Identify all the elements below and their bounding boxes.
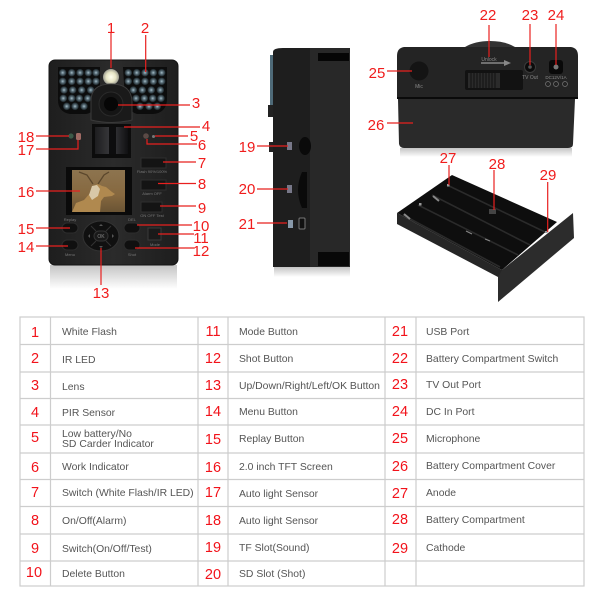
- callout numbers: 14: [18, 239, 34, 256]
- callout numbers: 12: [193, 243, 209, 260]
- icon: left buttons: Menu: [65, 252, 75, 257]
- callout numbers: 26: [368, 117, 384, 134]
- callout numbers: 20: [239, 181, 255, 198]
- icon: PIR sensor: [92, 124, 131, 158]
- panel: back view of camera: [397, 41, 578, 157]
- column 2 descriptions: [239, 327, 380, 580]
- column 3 descriptions: Microphone: [426, 434, 481, 445]
- column 3 descriptions: [426, 327, 558, 554]
- icon: IR LED array right: [123, 67, 167, 114]
- icon: direction pad: OK: [97, 234, 105, 240]
- icon: TV out port: [522, 62, 539, 81]
- 2.0 inch TFT screen: [66, 167, 132, 215]
- column 2 descriptions: 2.0 inch TFT Screen: [239, 462, 333, 473]
- callout numbers: 6: [198, 137, 206, 154]
- callout numbers: 11: [193, 230, 209, 247]
- column 1 descriptions: SD Carder Indicator: [62, 439, 154, 450]
- callout numbers: [18, 7, 564, 302]
- column 1 descriptions: [62, 327, 194, 580]
- callout numbers: 21: [239, 216, 255, 233]
- icon: switches: [137, 158, 168, 218]
- column 1 descriptions: On/Off(Alarm): [62, 516, 126, 527]
- column 2 descriptions: Auto light Sensor: [239, 516, 319, 527]
- callout numbers: 7: [198, 155, 206, 172]
- column 2 numbers: 17: [205, 485, 221, 501]
- front reflection: [50, 265, 177, 289]
- callout numbers: 15: [18, 221, 34, 238]
- callout numbers: 18: [18, 129, 34, 146]
- panel: front view of camera: [49, 60, 178, 289]
- column 3 numbers: [392, 324, 408, 557]
- tray outer wall: [397, 213, 502, 278]
- callout numbers: 17: [18, 142, 34, 159]
- column 2 numbers: 18: [205, 513, 221, 529]
- icon: indicators: [143, 133, 155, 139]
- column 1 numbers: 1: [31, 325, 39, 341]
- column 1 descriptions: Work Indicator: [62, 462, 129, 473]
- icon: right buttons: [124, 217, 161, 257]
- column 2 numbers: 13: [205, 378, 221, 394]
- column 1 descriptions: Switch (White Flash/IR LED): [62, 488, 194, 499]
- callout numbers: 8: [198, 176, 206, 193]
- column 2 descriptions: Menu Button: [239, 407, 298, 418]
- column 1 numbers: 2: [31, 351, 39, 367]
- callout numbers: 4: [202, 118, 210, 135]
- column 3 numbers: 22: [392, 351, 408, 367]
- callout numbers: 2: [141, 20, 149, 37]
- column 2 descriptions: TF Slot(Sound): [239, 543, 309, 554]
- column 3 numbers: 23: [392, 377, 408, 393]
- springs and contacts: [404, 184, 548, 241]
- column 1 numbers: [26, 325, 42, 581]
- column 3 numbers: 27: [392, 486, 408, 502]
- icon: SD slot: [287, 172, 307, 208]
- callout numbers: 24: [548, 7, 564, 24]
- column 2 descriptions: Mode Button: [239, 327, 298, 338]
- table: parts legend: [20, 317, 584, 586]
- icon: switches: Alarm OFF: [142, 191, 162, 196]
- column 3 numbers: 29: [392, 541, 408, 557]
- icon: microphone: Mic: [415, 84, 423, 90]
- icon: battery switch: [465, 57, 523, 90]
- icon: left buttons: Replay: [64, 217, 76, 222]
- column 1 numbers: 3: [31, 378, 39, 394]
- icon: right buttons: DEL: [128, 217, 137, 222]
- column 1 numbers: 5: [31, 430, 39, 446]
- callout numbers: 29: [540, 167, 556, 184]
- column 1 numbers: 6: [31, 460, 39, 476]
- battery channel ridges: [403, 185, 545, 267]
- callout numbers: 28: [489, 156, 505, 173]
- callout numbers: 23: [522, 7, 538, 24]
- camera front body: [49, 60, 178, 265]
- callout numbers: 10: [193, 218, 209, 235]
- column 2 numbers: 19: [205, 540, 221, 556]
- callout numbers: 3: [192, 95, 200, 112]
- column 2 numbers: 15: [205, 432, 221, 448]
- icon: DC in port: [545, 60, 568, 86]
- column 1 numbers: 7: [31, 485, 39, 501]
- column 3 descriptions: Cathode: [426, 543, 466, 554]
- icon: white flash: [103, 69, 119, 85]
- icon: right buttons: Shot: [128, 252, 137, 257]
- column 2 descriptions: Up/Down/Right/Left/OK Button: [239, 381, 380, 392]
- column 2 descriptions: Replay Button: [239, 434, 304, 445]
- icon: IR LED array left: [58, 67, 100, 114]
- column 3 numbers: 26: [392, 459, 408, 475]
- column 2 numbers: 14: [205, 404, 221, 420]
- column 1 descriptions: Lens: [62, 382, 85, 393]
- icon: lens: [91, 84, 132, 122]
- front plate: [498, 213, 574, 302]
- column 1 numbers: 9: [31, 541, 39, 557]
- icon: switches: ON OFF Test: [140, 213, 165, 218]
- column 3 descriptions: Battery Compartment Cover: [426, 461, 556, 472]
- icon: DC in port: DC12V/1A: [545, 75, 567, 80]
- icon: direction pad: [83, 221, 119, 251]
- column 1 numbers: 8: [31, 513, 39, 529]
- icon: TF slot: [287, 137, 311, 155]
- callout numbers: 9: [198, 200, 206, 217]
- column 2 descriptions: SD Slot (Shot): [239, 569, 305, 580]
- panel: side view of camera: [268, 48, 350, 277]
- callouts: number labels and leader lines: [18, 7, 564, 302]
- top housing: [397, 47, 578, 97]
- callout numbers: 19: [239, 139, 255, 156]
- callout numbers: 22: [480, 7, 496, 24]
- column 2 numbers: 16: [205, 460, 221, 476]
- column 3 numbers: 28: [392, 512, 408, 528]
- icon: TV out port: TV Out: [522, 75, 539, 81]
- callout numbers: 25: [369, 65, 385, 82]
- column 3 descriptions: Battery Compartment: [426, 515, 525, 526]
- icon: right buttons: Mode: [150, 242, 161, 247]
- callout numbers: 16: [18, 184, 34, 201]
- tray floor: [397, 175, 557, 270]
- column 3 numbers: 25: [392, 431, 408, 447]
- icon: battery switch: Unlock: [481, 57, 497, 63]
- column 3 descriptions: Battery Compartment Switch: [426, 354, 558, 365]
- icon: switches: Flash 90%/100%: [137, 169, 168, 174]
- icon: USB port: [288, 218, 305, 229]
- column 2 numbers: 11: [205, 324, 221, 340]
- callout numbers: 27: [440, 150, 456, 167]
- column 3 descriptions: USB Port: [426, 327, 469, 338]
- column 2 numbers: 20: [205, 567, 221, 583]
- column 1 descriptions: IR LED: [62, 355, 96, 366]
- table grid: [20, 317, 584, 586]
- column 1 descriptions: PIR Sensor: [62, 408, 116, 419]
- callout numbers: 5: [190, 128, 198, 145]
- column 1 descriptions: Switch(On/Off/Test): [62, 544, 152, 555]
- column 3 numbers: 24: [392, 404, 408, 420]
- back reflection: [400, 148, 572, 157]
- battery cover: [397, 97, 578, 148]
- column 2 descriptions: Auto light Sensor: [239, 489, 319, 500]
- panel: battery tray: [397, 175, 574, 302]
- column 3 numbers: 21: [392, 324, 408, 340]
- column 2 numbers: [205, 324, 221, 583]
- column 1 descriptions: Delete Button: [62, 569, 125, 580]
- lens bump: [465, 41, 515, 47]
- column 2 descriptions: Shot Button: [239, 354, 294, 365]
- column 1 numbers: 4: [31, 405, 39, 421]
- column 3 descriptions: DC In Port: [426, 407, 475, 418]
- column 1 descriptions: Low battery/No: [62, 429, 132, 440]
- camera side body: [268, 48, 350, 267]
- callout numbers: 1: [107, 20, 115, 37]
- icon: auto light sensors: [68, 133, 81, 140]
- column 3 descriptions: Anode: [426, 488, 456, 499]
- column 2 numbers: 12: [205, 351, 221, 367]
- column 1 descriptions: White Flash: [62, 327, 117, 338]
- callout lines: [36, 24, 556, 285]
- callout numbers: 13: [93, 285, 109, 302]
- icon: microphone: [410, 62, 428, 90]
- icon: left buttons: [62, 217, 78, 257]
- column 3 descriptions: TV Out Port: [426, 380, 481, 391]
- column 1 numbers: 10: [26, 565, 42, 581]
- side reflection: [274, 267, 350, 277]
